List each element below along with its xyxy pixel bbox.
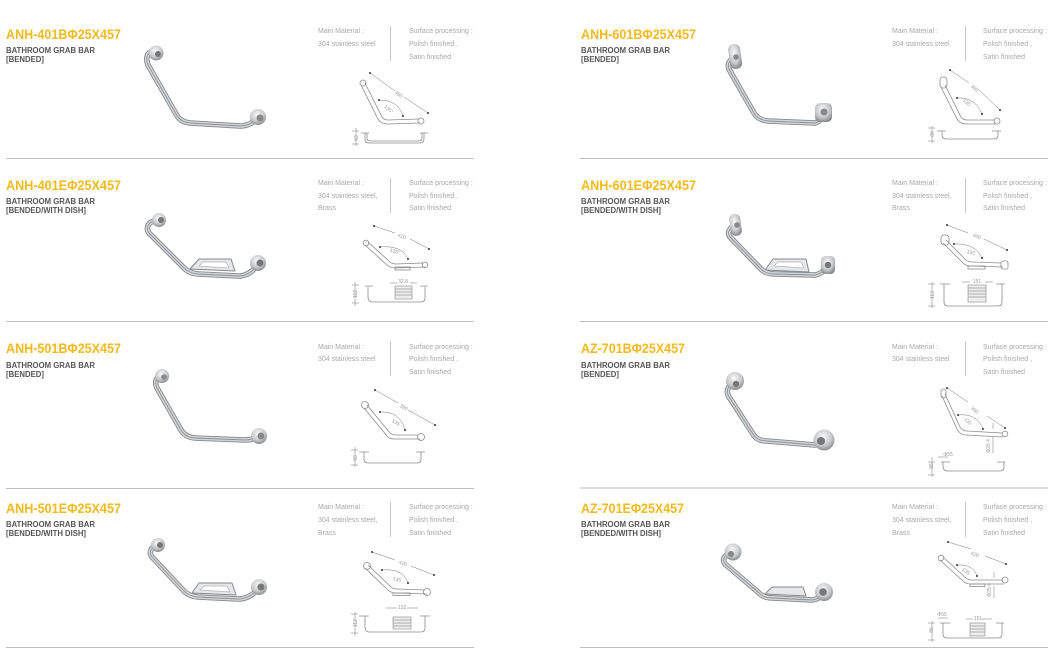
technical drawing: 135 xyxy=(962,417,973,427)
technical drawing: 86 xyxy=(929,627,935,633)
technical drawing: 135 xyxy=(392,576,402,584)
product description xyxy=(6,197,95,215)
material text: Main Material : xyxy=(318,28,364,35)
grab bar photo with dish xyxy=(147,213,266,276)
product description: BATHROOM GRAB BAR xyxy=(6,361,95,370)
heading: ANH-601B: ANH-601BΦ25X457 xyxy=(581,27,696,42)
heading: AZ-701B: AZ-701BΦ25X457 xyxy=(581,341,685,356)
product description xyxy=(6,361,95,379)
surface processing text xyxy=(409,28,473,61)
material text: 304 stainless steel xyxy=(318,41,376,48)
product description xyxy=(581,197,670,215)
surface processing text xyxy=(409,180,473,212)
material text: Brass xyxy=(318,205,336,212)
material text: Main Material : xyxy=(892,504,938,511)
technical drawing: 32.8 xyxy=(398,279,408,285)
technical drawing: 420 xyxy=(397,233,407,241)
heading: ANH-401E: ANH-401EΦ25X457 xyxy=(6,178,121,193)
product description xyxy=(6,46,95,64)
technical drawing: 132 xyxy=(398,605,406,611)
product description: [BENDED] xyxy=(581,55,619,64)
surface processing text: Satin finished xyxy=(983,369,1025,376)
surface processing text: Satin finished xyxy=(409,369,451,376)
product description xyxy=(581,361,670,379)
technical drawing: 135 xyxy=(961,98,972,108)
material text: Main Material : xyxy=(318,504,364,511)
surface processing text xyxy=(409,344,473,376)
product description: [BENDED] xyxy=(581,370,619,379)
technical drawing: 113 xyxy=(930,291,936,299)
surface processing text: Polish finished , xyxy=(409,193,458,200)
product description: [BENDED/WITH DISH] xyxy=(581,529,661,538)
panel: ANH-601E xyxy=(581,178,1047,308)
material text xyxy=(318,504,378,537)
product description: BATHROOM GRAB BAR xyxy=(581,197,670,206)
material text: 304 stainless steel, xyxy=(318,193,378,200)
surface processing text xyxy=(983,504,1047,537)
material text xyxy=(892,180,952,212)
surface processing text: Surface processing : xyxy=(409,28,473,35)
product description: BATHROOM GRAB BAR xyxy=(6,46,95,55)
technical drawing xyxy=(928,69,1001,143)
surface processing text xyxy=(409,504,473,537)
surface processing text: Surface processing : xyxy=(983,504,1047,511)
heading: ANH-501E: ANH-501EΦ25X457 xyxy=(6,501,121,516)
technical drawing: 83 xyxy=(353,455,359,461)
material text: Brass xyxy=(892,530,910,537)
product description: BATHROOM GRAB BAR xyxy=(581,520,670,529)
surface processing text: Polish finished , xyxy=(409,517,458,524)
material text: 304 stainless steel, xyxy=(892,517,952,524)
product description: [BENDED/WITH DISH] xyxy=(6,529,86,538)
panel: ANH-501B xyxy=(6,341,473,467)
material text: 304 stainless steel xyxy=(892,356,950,363)
technical drawing xyxy=(928,387,1008,477)
material text: Main Material : xyxy=(892,28,938,35)
material text: 304 stainless steel, xyxy=(892,193,952,200)
surface processing text: Surface processing : xyxy=(409,504,473,511)
product description: [BENDED] xyxy=(6,55,44,64)
surface processing text xyxy=(983,344,1047,376)
material text xyxy=(318,28,376,48)
technical drawing: 135° xyxy=(389,248,401,256)
heading: ANH-401B: ANH-401BΦ25X457 xyxy=(6,27,121,42)
technical drawing: 80 xyxy=(930,131,936,137)
material text: Brass xyxy=(892,205,910,212)
technical drawing: Φ55 xyxy=(943,452,953,458)
product description xyxy=(581,520,670,538)
surface processing text: Surface processing : xyxy=(983,28,1047,35)
panel: ANH-401E xyxy=(6,178,473,306)
panel: ANH-401B xyxy=(6,26,473,146)
product description: [BENDED/WITH DISH] xyxy=(581,206,661,215)
material text: 304 stainless steel xyxy=(892,41,950,48)
panel: AZ-701B xyxy=(581,341,1047,477)
technical drawing xyxy=(352,225,430,306)
technical drawing: Φ25.4 xyxy=(987,583,993,597)
product description xyxy=(6,520,95,538)
technical drawing: 400 xyxy=(972,233,982,241)
surface processing text xyxy=(983,180,1047,212)
technical drawing: 135 xyxy=(966,249,976,257)
product description: BATHROOM GRAB BAR xyxy=(581,46,670,55)
technical drawing: 83 xyxy=(354,135,360,141)
surface processing text xyxy=(983,28,1047,61)
surface processing text: Surface processing : xyxy=(409,180,473,187)
surface processing text: Polish finished , xyxy=(983,41,1032,48)
technical drawing: 380 xyxy=(393,90,404,100)
technical drawing: Φ55 xyxy=(937,612,947,618)
material text: Brass xyxy=(318,530,336,537)
grab bar photo with dish xyxy=(729,213,835,275)
technical drawing xyxy=(928,224,1008,308)
surface processing text: Satin finished xyxy=(409,205,451,212)
technical drawing: 151 xyxy=(973,279,981,285)
technical drawing: 420 xyxy=(398,560,408,568)
panel: AZ-701E xyxy=(581,501,1047,642)
technical drawing xyxy=(928,541,1008,642)
technical drawing: Φ25.4 xyxy=(986,439,992,453)
product description xyxy=(581,46,670,64)
surface processing text: Polish finished , xyxy=(983,356,1032,363)
technical drawing: 135 xyxy=(960,567,971,577)
grab bar photo xyxy=(155,369,267,444)
surface processing text: Satin finished xyxy=(983,54,1025,61)
technical drawing: 380 xyxy=(969,84,980,94)
surface processing text: Polish finished , xyxy=(983,193,1032,200)
surface processing text: Surface processing : xyxy=(983,180,1047,187)
material text xyxy=(892,28,950,48)
surface processing text: Polish finished , xyxy=(409,41,458,48)
material text: Main Material : xyxy=(318,180,364,187)
technical drawing xyxy=(352,72,429,146)
material text xyxy=(318,344,376,363)
technical drawing: 135 xyxy=(390,418,401,428)
heading: AZ-701E: AZ-701EΦ25X457 xyxy=(581,501,684,516)
material text: Main Material : xyxy=(892,180,938,187)
grab bar photo xyxy=(727,43,832,123)
technical drawing: 151 xyxy=(974,616,982,622)
technical drawing: 112 xyxy=(353,619,359,627)
technical drawing: 112 xyxy=(353,290,359,298)
material text xyxy=(892,504,952,537)
panel: ANH-601B xyxy=(581,26,1047,143)
surface processing text: Surface processing : xyxy=(983,344,1047,351)
grab bar photo with dish xyxy=(724,544,833,601)
product description: [BENDED] xyxy=(6,370,44,379)
material text xyxy=(892,344,950,363)
grab bar photo xyxy=(726,372,834,450)
technical drawing xyxy=(351,551,435,636)
grab bar photo xyxy=(147,46,266,126)
technical drawing: 380 xyxy=(969,406,980,416)
heading: ANH-501B: ANH-501BΦ25X457 xyxy=(6,341,121,356)
surface processing text: Polish finished , xyxy=(409,356,458,363)
technical drawing: 380 xyxy=(398,403,409,413)
material text: Main Material : xyxy=(318,344,364,351)
material text: 304 stainless steel, xyxy=(318,517,378,524)
technical drawing xyxy=(351,389,436,467)
grab bar photo with dish xyxy=(150,538,267,599)
material text xyxy=(318,180,378,212)
heading: ANH-601E: ANH-601EΦ25X457 xyxy=(581,178,696,193)
surface processing text: Satin finished xyxy=(983,530,1025,537)
product description: [BENDED/WITH DISH] xyxy=(6,206,86,215)
product description: BATHROOM GRAB BAR xyxy=(6,197,95,206)
panel: ANH-501E xyxy=(6,501,473,636)
surface processing text: Polish finished , xyxy=(983,517,1032,524)
surface processing text: Surface processing : xyxy=(409,344,473,351)
material text: 304 stainless steel xyxy=(318,356,376,363)
material text: Main Material : xyxy=(892,344,938,351)
surface processing text: Satin finished xyxy=(409,530,451,537)
technical drawing: 86 xyxy=(929,463,935,469)
technical drawing: 135° xyxy=(382,104,394,115)
surface processing text: Satin finished xyxy=(409,54,451,61)
surface processing text: Satin finished xyxy=(983,205,1025,212)
technical drawing: 420 xyxy=(970,551,980,559)
product description: BATHROOM GRAB BAR xyxy=(581,361,670,370)
product description: BATHROOM GRAB BAR xyxy=(6,520,95,529)
